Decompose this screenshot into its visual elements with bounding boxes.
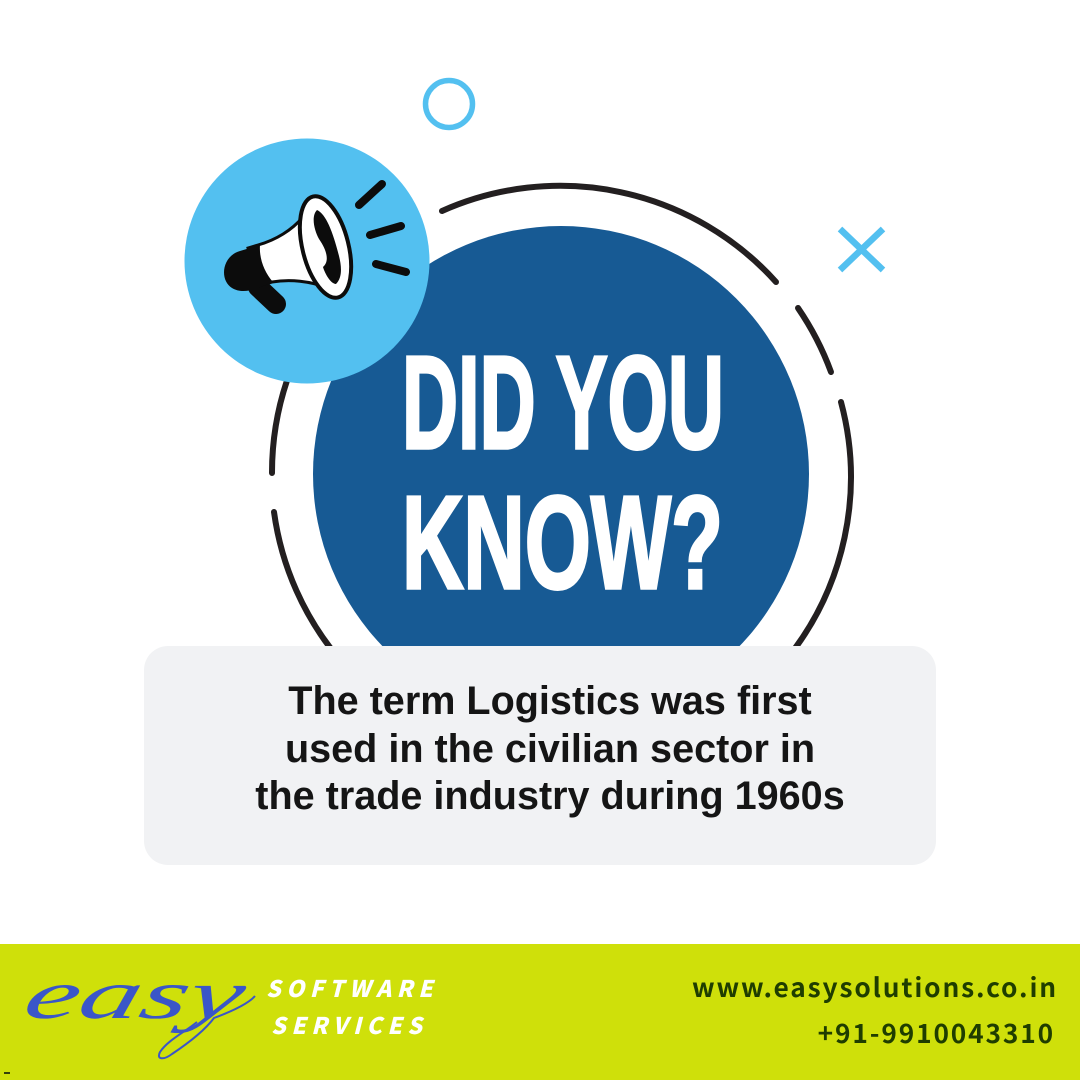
logo wordmark: software services: SERVICES: [271, 1007, 427, 1041]
segmented ring: [272, 186, 851, 660]
fact text: [255, 679, 845, 818]
icon: megaphone: [224, 191, 360, 304]
headline: did you know: [402, 329, 724, 616]
headline: did you know: KNOW?: [402, 469, 723, 616]
contact details: www.easysolutions.co.in: [692, 966, 1058, 1005]
fact text: the trade industry during 1960s: [255, 774, 845, 818]
footer band: [0, 944, 1080, 1080]
contact details: [692, 966, 1058, 1051]
logo wordmark: software services: [266, 970, 438, 1041]
decorative circle outline: [426, 80, 472, 128]
fact panel: [144, 646, 936, 865]
logo script: easy: easy: [17, 955, 255, 1033]
small corner mark: [4, 1072, 10, 1074]
fact text: The term Logistics was first: [288, 679, 812, 723]
icon: sound lines: [359, 184, 406, 272]
fact text: used in the civilian sector in: [285, 726, 815, 770]
decorative cross: [840, 229, 883, 270]
contact details: +91-9910043310: [818, 1012, 1055, 1051]
large blue circle: [313, 226, 809, 722]
light blue megaphone badge: [184, 138, 430, 384]
logo wordmark: software services: SOFTWARE: [266, 970, 438, 1004]
headline: did you know: DID YOU: [402, 329, 724, 476]
